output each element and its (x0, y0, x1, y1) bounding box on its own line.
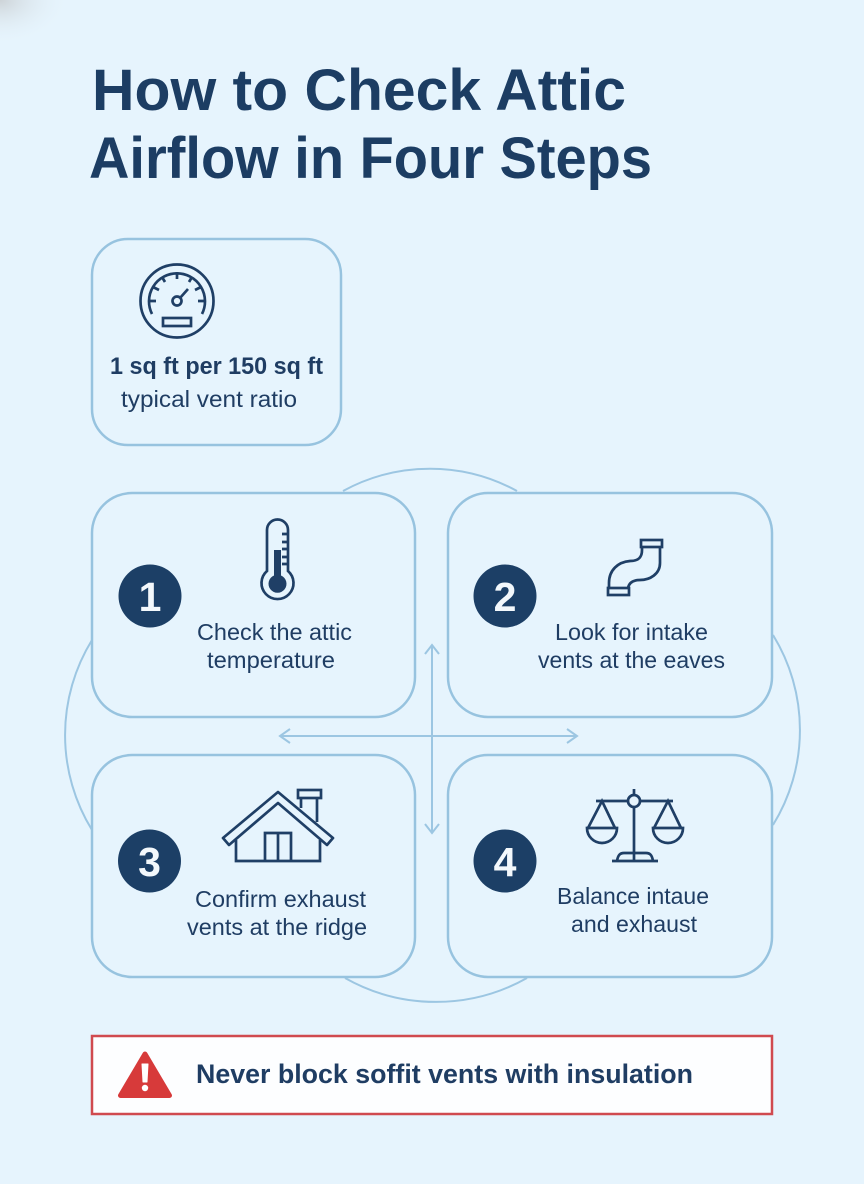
step 3 text: vents at the ridge (187, 914, 367, 940)
icon: balance scale (587, 789, 683, 861)
step number 1: 1 (139, 574, 161, 620)
background circular flow arcs (65, 469, 800, 1002)
step 2 text: vents at the eaves (538, 647, 725, 673)
step 2 text (538, 619, 725, 673)
step 1 text: temperature (207, 647, 335, 673)
panel: step 4 (448, 755, 772, 977)
step 4 text: and exhaust (571, 911, 698, 937)
step number 1 (118, 564, 182, 628)
icon: house with chimney (223, 790, 333, 861)
step number 2 (474, 564, 536, 628)
panel: vent ratio stat (92, 239, 341, 445)
icon: thermometer (262, 520, 294, 599)
icon: pipe elbow (608, 540, 662, 595)
step number 2: 2 (494, 574, 516, 620)
panel: step 1 (92, 493, 415, 717)
step number 4 (474, 830, 536, 892)
panel: step 2 (448, 493, 772, 717)
icon: gauge (140, 264, 214, 338)
arrows: cross connector (280, 645, 577, 833)
step 3 text: Confirm exhaust (195, 886, 367, 912)
step number 4: 4 (494, 839, 517, 885)
stat caption: typical vent ratio (121, 386, 297, 412)
stat value: 1 sq ft per 150 sq ft (110, 353, 323, 380)
step number 3: 3 (138, 839, 161, 885)
step 4 text: Balance intaue (557, 883, 709, 909)
step 1 text (197, 619, 352, 673)
callout: warning (92, 1036, 772, 1114)
icon: warning triangle (120, 1054, 170, 1096)
step 2 text: Look for intake (555, 619, 708, 645)
step 1 text: Check the attic (197, 619, 352, 645)
step 3 text (187, 886, 367, 940)
warning text: Never block soffit vents with insulation (196, 1059, 693, 1089)
panel: step 3 (92, 755, 415, 977)
step 4 text (557, 883, 709, 937)
step number 3 (118, 830, 181, 892)
title (89, 58, 652, 191)
title: Airflow in Four Steps (89, 126, 652, 191)
title: How to Check Attic (92, 58, 626, 123)
